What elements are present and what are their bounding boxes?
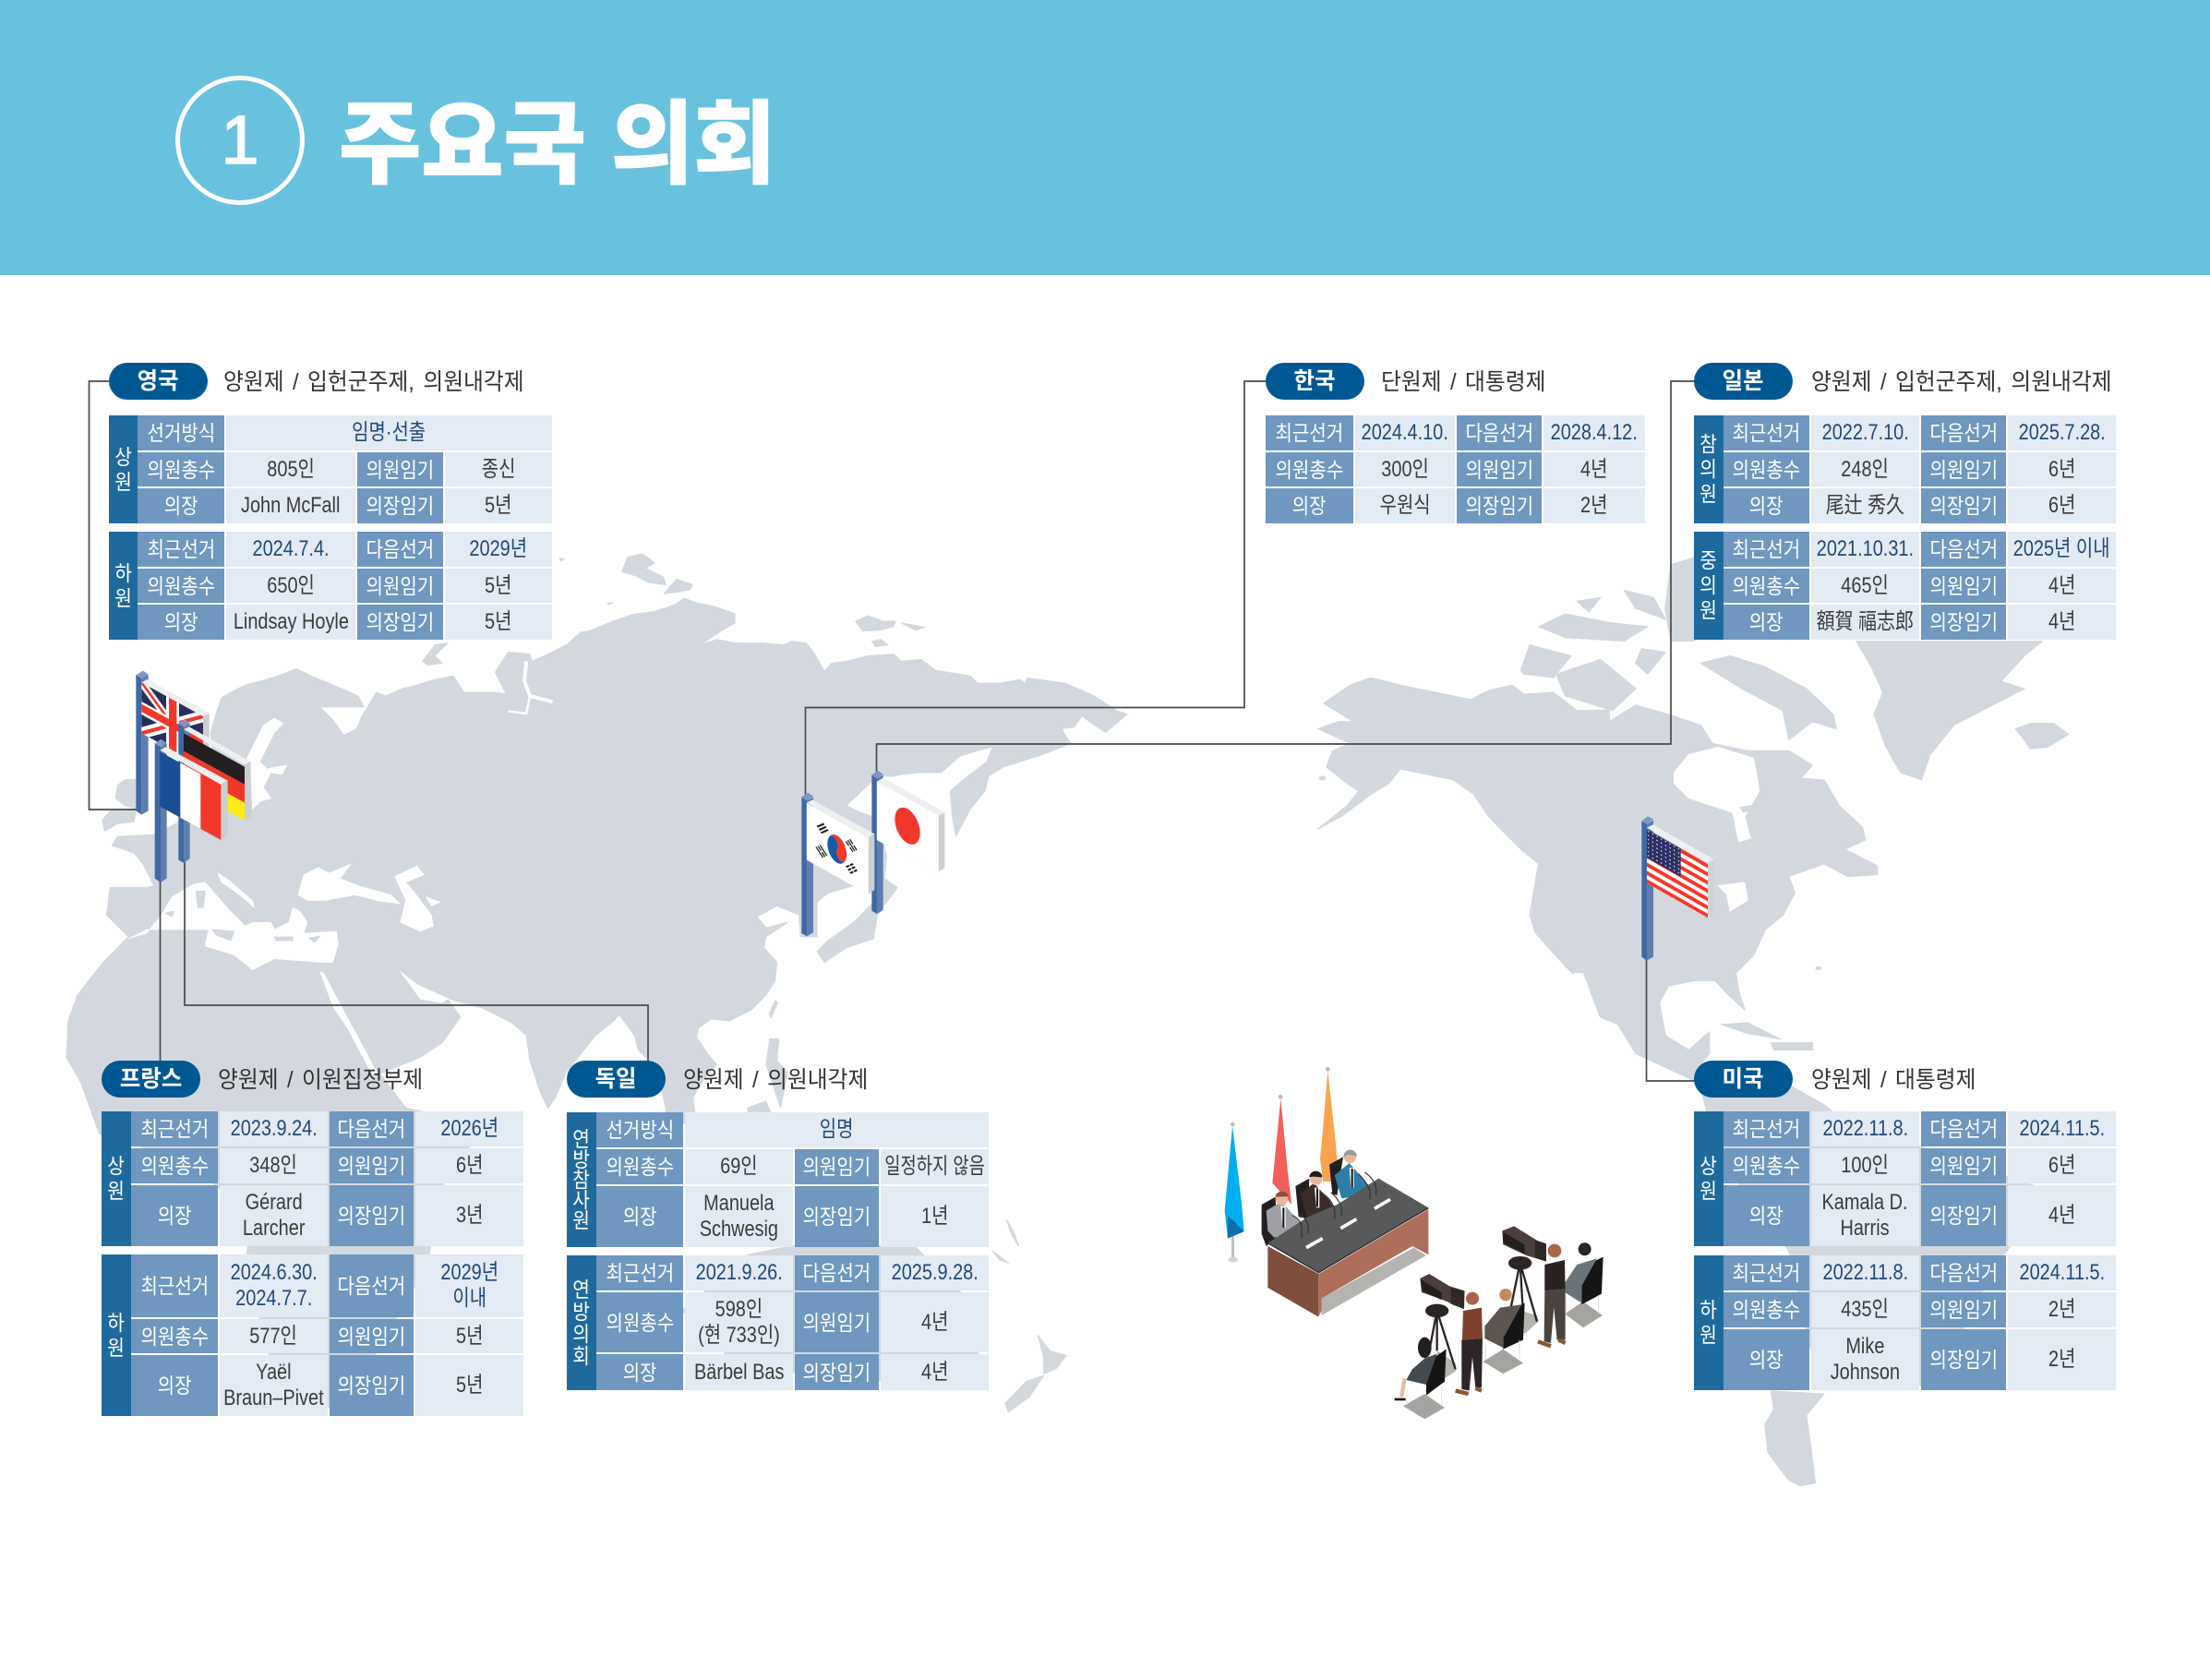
title: 주요국 의회	[339, 71, 775, 202]
table: 일본 중의원	[1694, 532, 2116, 640]
table: 한국 국회: 우원식	[1380, 493, 1430, 518]
table: 미국 상원: 2024.11.5.	[2019, 1116, 2105, 1141]
table: 영국 상원	[109, 415, 552, 523]
table: 한국 국회: 300인	[1381, 456, 1429, 482]
table: 독일 연방참사원: 69인	[720, 1154, 758, 1179]
table: 일본 중의원: 원	[1700, 598, 1717, 622]
table: 독일 연방의회: 최근선거	[606, 1261, 674, 1285]
table: 미국 하원: 2022.11.8.	[1822, 1260, 1908, 1285]
table: 프랑스 상원: 2026년	[440, 1116, 498, 1141]
table: 한국 국회: 의원총수	[1276, 458, 1343, 482]
camera crew: right	[1502, 1226, 1603, 1346]
table: 프랑스 하원: 의원임기	[338, 1324, 405, 1348]
table: 독일 연방의회: 2021.9.26.	[695, 1260, 783, 1285]
table: 일본 중의원: 의원총수	[1733, 574, 1800, 598]
table: 영국 상원: John McFall	[241, 493, 341, 518]
table: 영국 상원: 원	[114, 469, 132, 493]
table: 독일 연방의회: 다음선거	[803, 1261, 871, 1285]
country pill: 한국: 한국	[1294, 368, 1336, 394]
flag: UK	[136, 671, 210, 815]
table: 영국 하원: 의원임기	[366, 574, 434, 598]
table: 일본 중의원: 4년	[2048, 572, 2075, 598]
table: 한국 국회	[1266, 415, 1645, 523]
panel: 프랑스	[102, 1061, 523, 1416]
table: 한국 국회: 최근선거	[1276, 421, 1343, 445]
country pill: 일본: 일본	[1723, 368, 1764, 394]
table: 한국 국회: 의장	[1292, 494, 1327, 518]
table: 일본 중의원: 465인	[1842, 572, 1889, 598]
government system: 프랑스: 양원제 / 이원집정부제	[218, 1067, 423, 1093]
table: 독일 연방참사원: 임명	[820, 1117, 854, 1142]
table: 한국 국회: 다음선거	[1465, 421, 1533, 445]
table: 일본 참의원: 6년	[2048, 456, 2075, 482]
table: 일본 참의원: 원	[1700, 482, 1717, 506]
table: 미국 하원: 의장	[1749, 1348, 1784, 1372]
table: 프랑스 하원: 최근선거	[140, 1274, 209, 1298]
table: 일본 참의원	[1694, 415, 2116, 523]
table: 미국 하원: 435인	[1842, 1297, 1889, 1322]
table: 일본 중의원: 4년	[2048, 609, 2075, 634]
table: 영국 상원: 의원임기	[366, 458, 434, 482]
table: 프랑스 상원: 의원임기	[338, 1154, 405, 1178]
table: 프랑스 상원: 최근선거	[140, 1117, 209, 1141]
table: 일본 중의원: 의원임기	[1929, 574, 1998, 598]
table: 미국 하원: Johnson	[1831, 1360, 1900, 1385]
table: 미국 상원: Kamala D.	[1822, 1190, 1908, 1215]
table: 일본 참의원: 2022.7.10.	[1821, 420, 1909, 445]
table: 미국 상원: Harris	[1841, 1216, 1890, 1241]
table: 프랑스 하원: 의장	[158, 1374, 191, 1398]
table: 영국 하원: 최근선거	[147, 537, 215, 561]
blue flag	[1225, 1122, 1244, 1263]
table: 일본 참의원: 의	[1700, 457, 1717, 481]
table: 프랑스 하원: 2024.7.7.	[235, 1286, 312, 1311]
table: 프랑스 하원: Yaël	[256, 1360, 292, 1385]
table: 미국 상원: 6년	[2048, 1153, 2075, 1178]
table: 영국 상원: 의장임기	[366, 494, 434, 518]
table: 독일 연방참사원	[567, 1112, 989, 1247]
table: 독일 연방의회: 2025.9.28.	[891, 1260, 979, 1285]
table: 일본 참의원: 의장임기	[1929, 494, 1998, 518]
table: 프랑스 상원: 상	[108, 1154, 125, 1178]
table: 독일 연방의회: 회	[573, 1344, 590, 1368]
table: 독일 연방의회: Bärbel Bas	[694, 1359, 784, 1385]
table: 독일 연방의회: (현 733인)	[698, 1322, 780, 1348]
table: 한국 국회: 의원임기	[1465, 458, 1533, 482]
seated woman	[1395, 1338, 1447, 1419]
table: 독일 연방의회: 의원임기	[803, 1311, 871, 1335]
government system: 영국: 양원제 / 입헌군주제, 의원내각제	[223, 369, 524, 395]
country pill: 프랑스: 프랑스	[120, 1066, 182, 1092]
table: 미국 상원: 원	[1700, 1179, 1717, 1203]
table: 미국 하원: 2년	[2048, 1347, 2075, 1372]
country pill: 영국: 영국	[138, 368, 179, 394]
table: 프랑스 하원: 이내	[452, 1286, 486, 1311]
table: 미국 상원: 의장임기	[1929, 1204, 1998, 1228]
header banner	[0, 0, 2210, 275]
table: 영국 하원: 의장임기	[366, 610, 434, 634]
table: 프랑스 하원: 하	[108, 1311, 125, 1335]
connector: France	[159, 877, 161, 1062]
artwork layer: map, connectors, flags, illustration	[66, 380, 2070, 1486]
Australia	[683, 1246, 979, 1385]
table: 프랑스 상원	[102, 1111, 523, 1246]
table: 미국 상원: 2022.11.8.	[1822, 1116, 1908, 1141]
connector: USA	[1647, 955, 1695, 1081]
table: 독일 연방참사원: 원	[573, 1208, 590, 1232]
table: 독일 연방의회: 의장	[623, 1361, 656, 1385]
world map	[66, 554, 2069, 1486]
table: 독일 연방참사원: 참	[573, 1168, 590, 1192]
table: 일본 참의원: 의원총수	[1733, 458, 1800, 482]
table: 미국 하원: Mike	[1845, 1334, 1885, 1359]
table: 미국 하원: 2024.11.5.	[2019, 1260, 2105, 1285]
table: 독일 연방참사원: 연	[573, 1127, 590, 1151]
flag: USA	[1641, 816, 1714, 961]
table: 일본 참의원: 최근선거	[1733, 421, 1800, 445]
flags: Europe	[136, 671, 251, 882]
table: 일본 중의원: 최근선거	[1733, 537, 1800, 561]
table: 한국 국회: 4년	[1580, 456, 1608, 482]
flags: East Asia	[801, 771, 944, 936]
table: 독일 연방참사원: Schwesig	[700, 1217, 778, 1242]
table: 일본 참의원: 참	[1700, 432, 1717, 456]
table: 미국 하원: 원	[1700, 1323, 1717, 1347]
table: 프랑스 상원: 2023.9.24.	[230, 1116, 318, 1141]
table: 영국 하원: 의장	[164, 610, 198, 634]
illustration: parliament press conference	[1225, 1067, 1603, 1419]
table: 프랑스 하원: 577인	[250, 1324, 297, 1348]
table: 프랑스 상원: 3년	[456, 1203, 483, 1228]
table: 프랑스 상원: Gérard	[245, 1190, 302, 1215]
table: 미국 상원: 4년	[2048, 1203, 2075, 1228]
panel: 영국	[109, 363, 552, 640]
panel: 미국	[1694, 1061, 2116, 1390]
table: 미국 상원: 다음선거	[1929, 1117, 1998, 1141]
table: 영국 하원: 원	[114, 585, 132, 609]
table: 독일 연방참사원: 일정하지 않음	[884, 1154, 985, 1179]
red flag	[1272, 1095, 1291, 1205]
flag: Germany	[178, 719, 251, 863]
table: 영국 하원: 5년	[485, 609, 512, 634]
table: 일본 참의원: 의원임기	[1929, 458, 1998, 482]
table: 영국 하원: 650인	[267, 572, 315, 598]
table: 프랑스 하원	[102, 1254, 523, 1416]
country pill: 미국: 미국	[1723, 1066, 1764, 1092]
table: 독일 연방의회: 방	[573, 1300, 590, 1324]
table: 일본 참의원: 의장	[1749, 494, 1784, 518]
table: 독일 연방참사원: 의원총수	[606, 1155, 674, 1179]
table: 영국 상원: 선거방식	[147, 421, 215, 445]
table: 독일 연방참사원: 1년	[921, 1204, 948, 1229]
table: 독일 연방의회: 연	[573, 1278, 590, 1302]
table: 독일 연방의회: 의장임기	[803, 1361, 871, 1385]
table: 한국 국회: 의장임기	[1465, 494, 1533, 518]
table: 프랑스 하원: Braun–Pivet	[223, 1386, 324, 1410]
section number circle: 1	[221, 102, 259, 178]
table: 미국 하원: 2년	[2048, 1297, 2075, 1322]
desk	[1267, 1172, 1428, 1317]
table: 프랑스 하원: 의장임기	[338, 1374, 405, 1398]
table: 프랑스 상원: 의장임기	[338, 1204, 405, 1228]
table: 미국 하원	[1694, 1255, 2116, 1390]
table: 미국 상원: 의원총수	[1733, 1154, 1800, 1178]
connector: Japan	[877, 381, 1694, 774]
table: 영국 상원: 5년	[485, 493, 512, 518]
table: 한국 국회: 2028.4.12.	[1551, 420, 1638, 445]
table: 프랑스 하원: 5년	[456, 1324, 483, 1348]
table: 미국 하원: 하	[1700, 1298, 1717, 1322]
table: 영국 상원: 의장	[164, 494, 198, 518]
table: 독일 연방의회: 의원총수	[606, 1311, 674, 1335]
table: 영국 상원: 의원총수	[147, 458, 215, 482]
table: 독일 연방의회: 4년	[921, 1309, 948, 1335]
table: 미국 상원: 최근선거	[1733, 1117, 1800, 1141]
table: 영국 하원: 5년	[485, 572, 512, 598]
table: 독일 연방참사원: 선거방식	[606, 1118, 674, 1142]
table: 영국 상원: 종신	[482, 456, 515, 482]
table: 일본 중의원: 2021.10.31.	[1817, 536, 1914, 561]
connector: Germany	[185, 858, 648, 1062]
table: 일본 참의원: 다음선거	[1929, 421, 1998, 445]
table: 독일 연방의회	[567, 1255, 989, 1390]
country pill: 일본	[1694, 363, 1793, 400]
country pill: 미국	[1694, 1061, 1793, 1098]
table: 영국 하원: 2029년	[470, 536, 527, 561]
table: 독일 연방참사원: 사	[573, 1188, 590, 1212]
table: 한국 국회: 2년	[1580, 493, 1608, 518]
table: 미국 하원: 의원총수	[1733, 1298, 1800, 1322]
flag: Japan	[871, 771, 944, 914]
table: 프랑스 상원: 348인	[250, 1153, 297, 1178]
table: 영국 상원: 805인	[267, 456, 315, 482]
connector: Korea	[805, 381, 1266, 796]
table: 독일 연방참사원: 의원임기	[803, 1155, 871, 1179]
panel: 독일	[567, 1061, 989, 1390]
orange flag	[1320, 1067, 1338, 1182]
flag: France	[155, 739, 228, 882]
government system: 한국: 단원제 / 대통령제	[1381, 369, 1545, 395]
table: 영국 하원: 의원총수	[147, 574, 215, 598]
table: 영국 하원	[109, 532, 552, 640]
table: 프랑스 상원: 원	[108, 1179, 125, 1203]
table: 미국 상원: 상	[1700, 1154, 1717, 1178]
table: 미국 상원	[1694, 1111, 2116, 1246]
seated panel members	[1262, 1150, 1371, 1246]
table: 프랑스 하원: 원	[108, 1335, 125, 1359]
table: 미국 상원: 의장	[1749, 1204, 1784, 1228]
table: 프랑스 하원: 의원총수	[140, 1324, 209, 1348]
table: 일본 중의원: 중	[1700, 548, 1717, 572]
table: 영국 하원: Lindsay Hoyle	[233, 609, 349, 634]
table: 일본 중의원: 의장	[1749, 610, 1784, 634]
table: 프랑스 상원: 의장	[158, 1204, 191, 1228]
table: 영국 하원: 2024.7.4.	[252, 536, 330, 561]
table: 독일 연방의회: 4년	[921, 1359, 948, 1385]
table: 프랑스 하원: 2029년	[440, 1260, 498, 1285]
country pill: 독일	[567, 1061, 666, 1098]
table: 영국 하원: 하	[114, 561, 132, 585]
table: 프랑스 상원: 다음선거	[338, 1117, 405, 1141]
table: 프랑스 하원: 5년	[456, 1373, 483, 1398]
country pill: 프랑스	[102, 1061, 200, 1098]
government system: 독일: 양원제 / 의원내각제	[683, 1067, 868, 1093]
table: 영국 하원: 다음선거	[366, 537, 434, 561]
flag: South Korea	[801, 793, 874, 936]
table: 프랑스 하원: 2024.6.30.	[230, 1260, 318, 1285]
table: 독일 연방참사원: 방	[573, 1147, 590, 1171]
table: 영국 상원: 임명·선출	[353, 420, 426, 445]
table: 독일 연방의회: 598인	[715, 1296, 763, 1322]
connector: UK	[89, 381, 137, 810]
table: 독일 연방참사원: Manuela	[703, 1191, 775, 1216]
table: 일본 중의원: 의	[1700, 573, 1717, 597]
table: 미국 하원: 다음선거	[1929, 1261, 1998, 1285]
table: 일본 참의원: 尾辻 秀久	[1826, 493, 1904, 518]
table: 일본 중의원: 다음선거	[1929, 537, 1998, 561]
government system: 일본: 양원제 / 입헌군주제, 의원내각제	[1811, 369, 2112, 395]
table: 독일 연방의회: 의	[573, 1322, 590, 1346]
panel: 한국	[1266, 363, 1645, 523]
table: 한국 국회: 2024.4.10.	[1362, 420, 1448, 445]
government system: 미국: 양원제 / 대통령제	[1811, 1067, 1976, 1093]
table: 일본 참의원: 6년	[2048, 493, 2075, 518]
camera crew: middle	[1420, 1274, 1525, 1394]
table: 독일 연방참사원: 의장	[623, 1205, 656, 1229]
table: 미국 하원: 최근선거	[1733, 1261, 1800, 1285]
table: 독일 연방참사원: 의장임기	[803, 1205, 871, 1229]
table: 일본 중의원: 의장임기	[1929, 610, 1998, 634]
panel: 일본	[1694, 363, 2116, 640]
table: 영국 상원: 상	[114, 445, 132, 469]
table: 프랑스 상원: 6년	[456, 1153, 483, 1178]
table: 미국 하원: 의장임기	[1929, 1348, 1998, 1372]
country pill: 영국	[109, 363, 208, 400]
country pill: 한국	[1266, 363, 1364, 400]
country pill: 독일: 독일	[595, 1066, 637, 1092]
table: 미국 하원: 의원임기	[1929, 1298, 1998, 1322]
table: 미국 상원: 의원임기	[1929, 1154, 1998, 1178]
table: 일본 중의원: 2025년 이내	[2013, 536, 2110, 561]
table: 일본 중의원: 額賀 福志郎	[1817, 609, 1914, 634]
table: 미국 상원: 100인	[1842, 1153, 1889, 1178]
table: 프랑스 상원: 의원총수	[140, 1154, 209, 1178]
table: 프랑스 상원: Larcher	[243, 1216, 305, 1241]
table: 프랑스 하원: 다음선거	[338, 1274, 405, 1298]
table: 일본 참의원: 2025.7.28.	[2018, 420, 2106, 445]
table: 일본 참의원: 248인	[1842, 456, 1889, 482]
section number circle	[175, 76, 305, 205]
